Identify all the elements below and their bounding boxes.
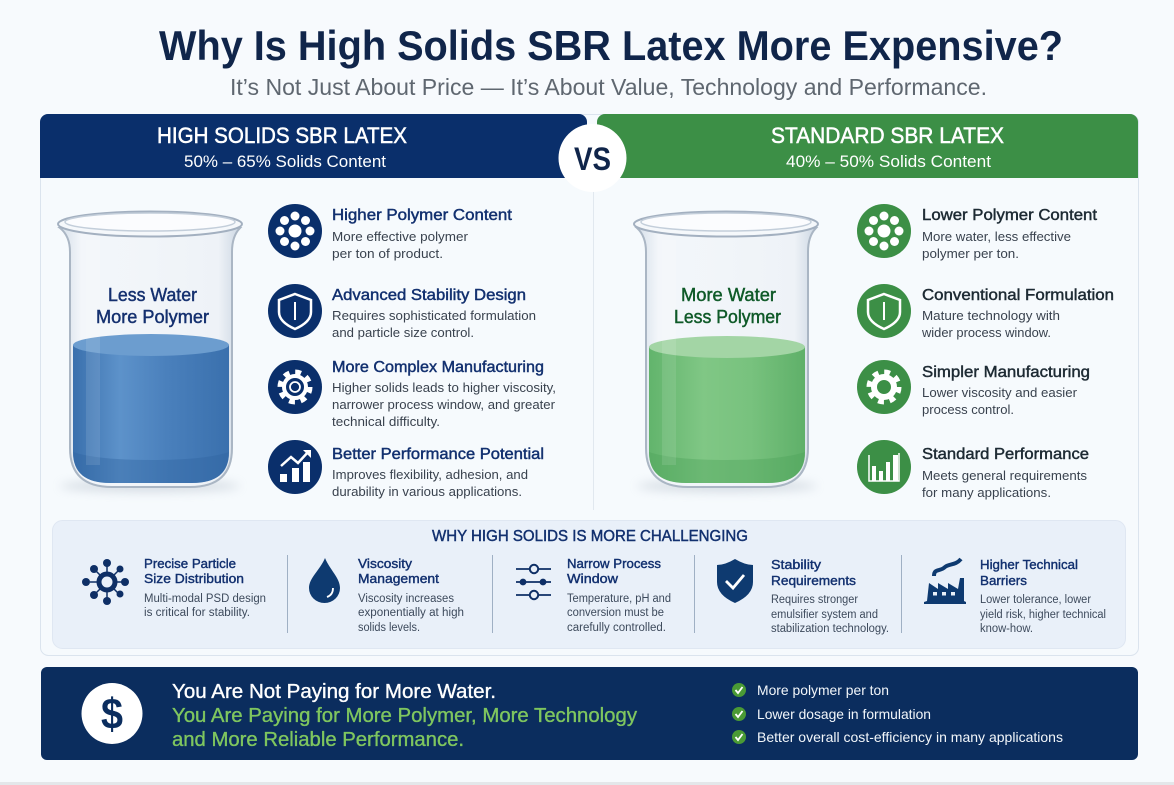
item: narrow process window: Window: [567, 571, 619, 586]
benefit: lower dosage: Lower dosage in formulation: [757, 706, 931, 722]
beaker label: [96, 285, 209, 327]
item: stability requirements: Requirements: [771, 573, 857, 588]
item: higher technical barriers: know-how.: [980, 623, 1033, 635]
feature: more complex manufacturing: narrower process window, and greater: [332, 397, 556, 412]
feature: simpler manufacturing: [922, 364, 1090, 417]
feature: lower polymer content: polymer per ton.: [922, 246, 1019, 261]
item: precise particle size distribution: is critical for stability.: [144, 607, 250, 619]
item: higher technical barriers: [980, 557, 1106, 635]
item: viscosity management: Management: [358, 571, 439, 586]
icon: rising chart: [268, 440, 322, 494]
beaker label: [674, 285, 781, 327]
icon: gear: [268, 360, 322, 414]
item: precise particle size distribution: Precise Particle: [144, 556, 236, 571]
icon: sliders: [516, 565, 551, 599]
feature: conventional formulation: Mature technology with: [922, 308, 1060, 323]
icon: dollar: [82, 683, 142, 744]
feature: conventional formulation: wider process window.: [921, 325, 1051, 340]
icon: shield: [857, 284, 911, 338]
feature: advanced stability design: Requires sophisticated formulation: [332, 308, 536, 323]
feature: more complex manufacturing: [332, 359, 556, 429]
item: higher technical barriers: Lower tolerance, lower: [980, 594, 1091, 606]
feature: lower polymer content: More water, less effective: [922, 229, 1071, 244]
banner: conclusion: [41, 667, 1138, 760]
item: narrow process window: [567, 556, 671, 634]
panel header: standard: STANDARD SBR LATEX: [771, 123, 1004, 148]
banner message: You Are Not Paying for More Water.: [172, 681, 496, 703]
item: viscosity management: Viscosity: [358, 556, 413, 571]
feature: advanced stability design: and particle size control.: [332, 325, 474, 340]
feature: advanced stability design: [332, 287, 536, 340]
feature: better performance potential: [332, 446, 544, 499]
feature: higher polymer content: per ton of product.: [332, 246, 443, 261]
banner message: [172, 681, 637, 751]
feature: advanced stability design: Advanced Stability Design: [332, 287, 526, 304]
item: stability requirements: [771, 557, 889, 635]
beaker: high solids: [58, 212, 242, 492]
list: high solids features: [268, 204, 556, 499]
item: higher technical barriers: Higher Technical: [980, 557, 1078, 572]
beaker label: More Water: [681, 285, 776, 305]
feature: better performance potential: Improves flexibility, adhesion, and: [332, 467, 528, 482]
VS badge: VS: [574, 141, 611, 177]
item: precise particle size distribution: [144, 556, 266, 619]
item: higher technical barriers: Barriers: [980, 573, 1028, 588]
icon: factory: [924, 559, 966, 604]
title: Why Is High Solids SBR Latex More Expensive?: [159, 22, 1063, 69]
item: narrow process window: Narrow Process: [567, 556, 662, 571]
beaker label: More Polymer: [96, 307, 209, 327]
item: viscosity management: Viscosity increases: [358, 593, 454, 605]
feature: higher polymer content: [332, 207, 513, 261]
subtitle: It’s Not Just About Price — It’s About Value, Technology and Performance.: [230, 74, 987, 100]
item: stability requirements: stabilization technology.: [771, 623, 889, 635]
item: viscosity management: exponentially at high: [358, 607, 464, 619]
feature: higher polymer content: Higher Polymer Content: [332, 207, 513, 224]
panel heading: WHY HIGH SOLIDS IS MORE CHALLENGING: [432, 528, 748, 545]
item: narrow process window: conversion must be: [567, 607, 664, 619]
icon: particle distribution: [82, 559, 129, 605]
feature: standard performance: for many applications.: [922, 485, 1051, 500]
icon: bar chart: [857, 440, 911, 494]
item: precise particle size distribution: Size Distribution: [144, 571, 244, 586]
feature: simpler manufacturing: Lower viscosity and easier: [922, 385, 1078, 400]
benefit: more polymer per ton: More polymer per ton: [757, 682, 889, 698]
feature: simpler manufacturing: Simpler Manufacturing: [922, 364, 1090, 381]
panel header: high solids: 50% – 65% Solids Content: [184, 152, 386, 171]
panel header: standard: 40% – 50% Solids Content: [786, 152, 991, 171]
feature: conventional formulation: Conventional Formulation: [922, 287, 1114, 304]
item: narrow process window: carefully controlled.: [567, 622, 666, 634]
item: stability requirements: Stability: [771, 557, 822, 572]
feature: conventional formulation: [921, 287, 1114, 340]
beaker: standard: [634, 212, 818, 492]
panel header: high solids: [40, 114, 587, 178]
feature: lower polymer content: [922, 207, 1098, 261]
feature: higher polymer content: More effective polymer: [332, 229, 469, 244]
feature: more complex manufacturing: Higher solids leads to higher viscosity,: [332, 380, 556, 395]
feature: lower polymer content: Lower Polymer Content: [922, 207, 1098, 224]
beaker label: Less Polymer: [674, 307, 781, 327]
icon: shield: [268, 284, 322, 338]
item: higher technical barriers: yield risk, higher technical: [980, 609, 1106, 621]
feature: standard performance: Standard Performance: [922, 446, 1089, 463]
icon: shield check: [717, 559, 753, 603]
VS badge: [558, 124, 626, 192]
icon: gear: [857, 360, 911, 414]
banner message: and More Reliable Performance.: [172, 729, 464, 751]
item: narrow process window: Temperature, pH and: [567, 593, 671, 605]
item: viscosity management: solids levels.: [358, 622, 420, 634]
item: viscosity management: [358, 556, 464, 634]
item: stability requirements: Requires stronger: [771, 594, 858, 606]
item: stability requirements: emulsifier system and: [771, 609, 878, 621]
panel: why high solids is more challenging: [52, 520, 1126, 648]
list: standard features: [857, 204, 1114, 500]
icon: drop: [309, 558, 340, 603]
icon: dollar: $: [101, 690, 123, 739]
feature: more complex manufacturing: technical difficulty.: [332, 414, 440, 429]
feature: standard performance: [922, 446, 1089, 500]
beaker label: Less Water: [108, 285, 197, 305]
icon: particles: [268, 204, 322, 258]
icon: particles: [857, 204, 911, 258]
feature: simpler manufacturing: process control.: [922, 402, 1014, 417]
panel header: high solids: HIGH SOLIDS SBR LATEX: [157, 123, 407, 148]
feature: more complex manufacturing: More Complex Manufacturing: [332, 359, 544, 376]
feature: better performance potential: durability in various applications.: [332, 484, 522, 499]
feature: better performance potential: Better Performance Potential: [332, 446, 544, 463]
panel: comparison container: [40, 114, 1138, 656]
item: precise particle size distribution: Multi-modal PSD design: [144, 593, 266, 605]
banner message: You Are Paying for More Polymer, More Technology: [172, 705, 637, 727]
panel header: standard: [597, 114, 1138, 178]
feature: standard performance: Meets general requirements: [922, 468, 1088, 483]
benefit: cost efficiency: Better overall cost-efficiency in many applications: [757, 729, 1063, 745]
